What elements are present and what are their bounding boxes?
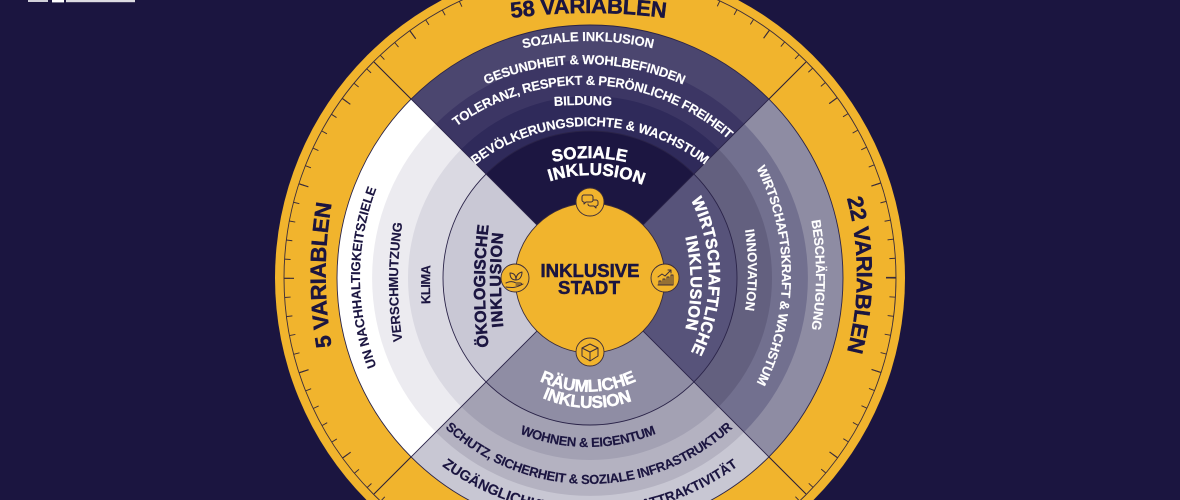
label: bildung: BILDUNG bbox=[554, 96, 612, 106]
centre circle: inklusive stadt: INKLUSIVE bbox=[540, 260, 640, 281]
cropped logo at top left bbox=[28, 0, 135, 2]
heading: soziale inklusion bbox=[547, 146, 646, 185]
panel: oekologische inklusion sector bbox=[337, 99, 590, 457]
panel: raeumliche inklusion sector bbox=[411, 278, 769, 500]
icon: growth chart bbox=[651, 264, 679, 292]
heading: oekologische inklusion bbox=[474, 224, 504, 348]
icon: speech bubbles bbox=[576, 188, 604, 216]
heading: raeumliche inklusion bbox=[540, 370, 636, 408]
icon: cube bbox=[576, 338, 604, 366]
icon: plant on hand bbox=[501, 264, 529, 292]
panel: wirtschaftliche inklusion sector bbox=[590, 99, 843, 457]
labels: oekologische inklusion bbox=[350, 186, 504, 369]
labels: raeumliche inklusion bbox=[442, 370, 736, 500]
label: beschaeftigung: BESCHÄFTIGUNG bbox=[811, 220, 828, 330]
outer yellow ring with scale ticks bbox=[275, 0, 905, 500]
label: gesundheit: GESUNDHEIT & WOHLBEFINDEN bbox=[484, 55, 686, 84]
variable count: 5 variablen: 5 VARIABLEN bbox=[310, 202, 332, 348]
label: toleranz: TOLERANZ, RESPEKT & PERÖNLICHE FREIHEIT bbox=[451, 76, 734, 138]
label: innovation: INNOVATION bbox=[745, 229, 757, 311]
centre circle: inklusive stadt bbox=[515, 203, 665, 353]
label: un nachhaltigkeitsziele: UN NACHHALTIGKEITSZIELE bbox=[350, 186, 376, 369]
label: wirtschaftskraft: WIRTSCHAFTSKRAFT & WACHSTUM bbox=[756, 164, 791, 386]
heading: raeumliche inklusion: INKLUSION bbox=[543, 387, 632, 408]
centre circle: inklusive stadt: STADT bbox=[558, 277, 621, 298]
heading: raeumliche inklusion: RÄUMLICHE bbox=[540, 370, 636, 392]
label: verschmutzung: VERSCHMUTZUNG bbox=[388, 222, 402, 342]
label: bevoelkerung: BEVÖLKERUNGSDICHTE & WACHSTUM bbox=[470, 116, 710, 164]
heading: soziale inklusion: SOZIALE bbox=[552, 146, 628, 162]
labels: wirtschaftliche inklusion bbox=[685, 164, 828, 386]
label: schutz: SCHUTZ, SICHERHEIT & SOZIALE INFRASTRUKTUR bbox=[446, 422, 733, 484]
sector outlines bbox=[337, 25, 843, 500]
heading: oekologische inklusion: ÖKOLOGISCHE bbox=[474, 224, 489, 348]
labels: soziale inklusion bbox=[451, 32, 734, 185]
heading: oekologische inklusion: INKLUSION bbox=[490, 233, 504, 328]
label: wohnen: WOHNEN & EIGENTUM bbox=[522, 425, 656, 448]
label: klima: KLIMA bbox=[420, 265, 430, 304]
panel: soziale inklusion sector bbox=[411, 25, 769, 278]
heading: soziale inklusion: INKLUSION bbox=[547, 163, 646, 185]
heading: wirtschaftliche inklusion: INKLUSION bbox=[685, 235, 702, 330]
variable count: 22 variablen: 22 VARIABLEN bbox=[846, 196, 872, 354]
label: zugaenglichkeit bbox=[442, 458, 736, 500]
heading: wirtschaftliche inklusion: WIRTSCHAFTLICHE bbox=[691, 194, 720, 356]
label: soziale inklusion: SOZIALE INKLUSION bbox=[522, 32, 654, 48]
